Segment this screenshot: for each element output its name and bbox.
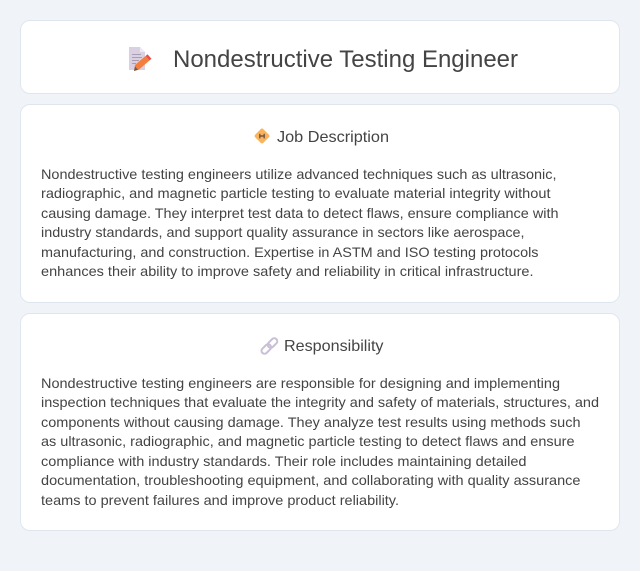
text block: responsibility: documentation, troubleshooting equipment, and collaborating with quality assurance (41, 472, 581, 488)
heading: responsibility: Responsibility (284, 338, 384, 355)
text block: job description: enhances their ability to improve safety and reliability in critical infrastructure. (41, 263, 534, 279)
text block: responsibility: as ultrasonic, radiographic, and magnetic particle testing to detect flaws and ensure (41, 433, 575, 449)
text block: responsibility: Nondestructive testing engineers are responsible for designing and implementing (41, 375, 560, 391)
text block: job description: radiographic, and magnetic particle testing to evaluate material integrity without (41, 185, 551, 201)
text block: responsibility: components without causing damage. They analyze test results using methods such (41, 414, 580, 430)
icon: orange diamond sign (254, 128, 270, 144)
icon: chain link (260, 337, 278, 355)
text block: job description: manufacturing, and construction. Expertise in ASTM and ISO testing protocols (41, 244, 538, 260)
text block: responsibility (41, 375, 599, 508)
panel: title card (20, 20, 620, 94)
icon: document with pencil (129, 47, 152, 71)
text block: job description: causing damage. They interpret test data to detect flaws, ensure compliance with (41, 205, 558, 221)
panel: job description (20, 104, 620, 303)
text block: job description: industry standards, and support quality assurance in sectors like aerospace, (41, 224, 524, 240)
title: Nondestructive Testing Engineer (173, 46, 518, 73)
heading: job description: Job Description (277, 129, 389, 146)
text block: responsibility: compliance with industry standards. Their role includes maintaining detailed (41, 453, 526, 469)
text block: responsibility: inspection techniques that evaluate the integrity and safety of materials, structures, and (41, 394, 599, 410)
text block: responsibility: teams to prevent failures and improve product reliability. (41, 492, 399, 508)
text block: job description: Nondestructive testing engineers utilize advanced techniques such as ultrasonic, (41, 166, 556, 182)
panel: responsibility (20, 313, 620, 531)
text block: job description (41, 166, 558, 279)
